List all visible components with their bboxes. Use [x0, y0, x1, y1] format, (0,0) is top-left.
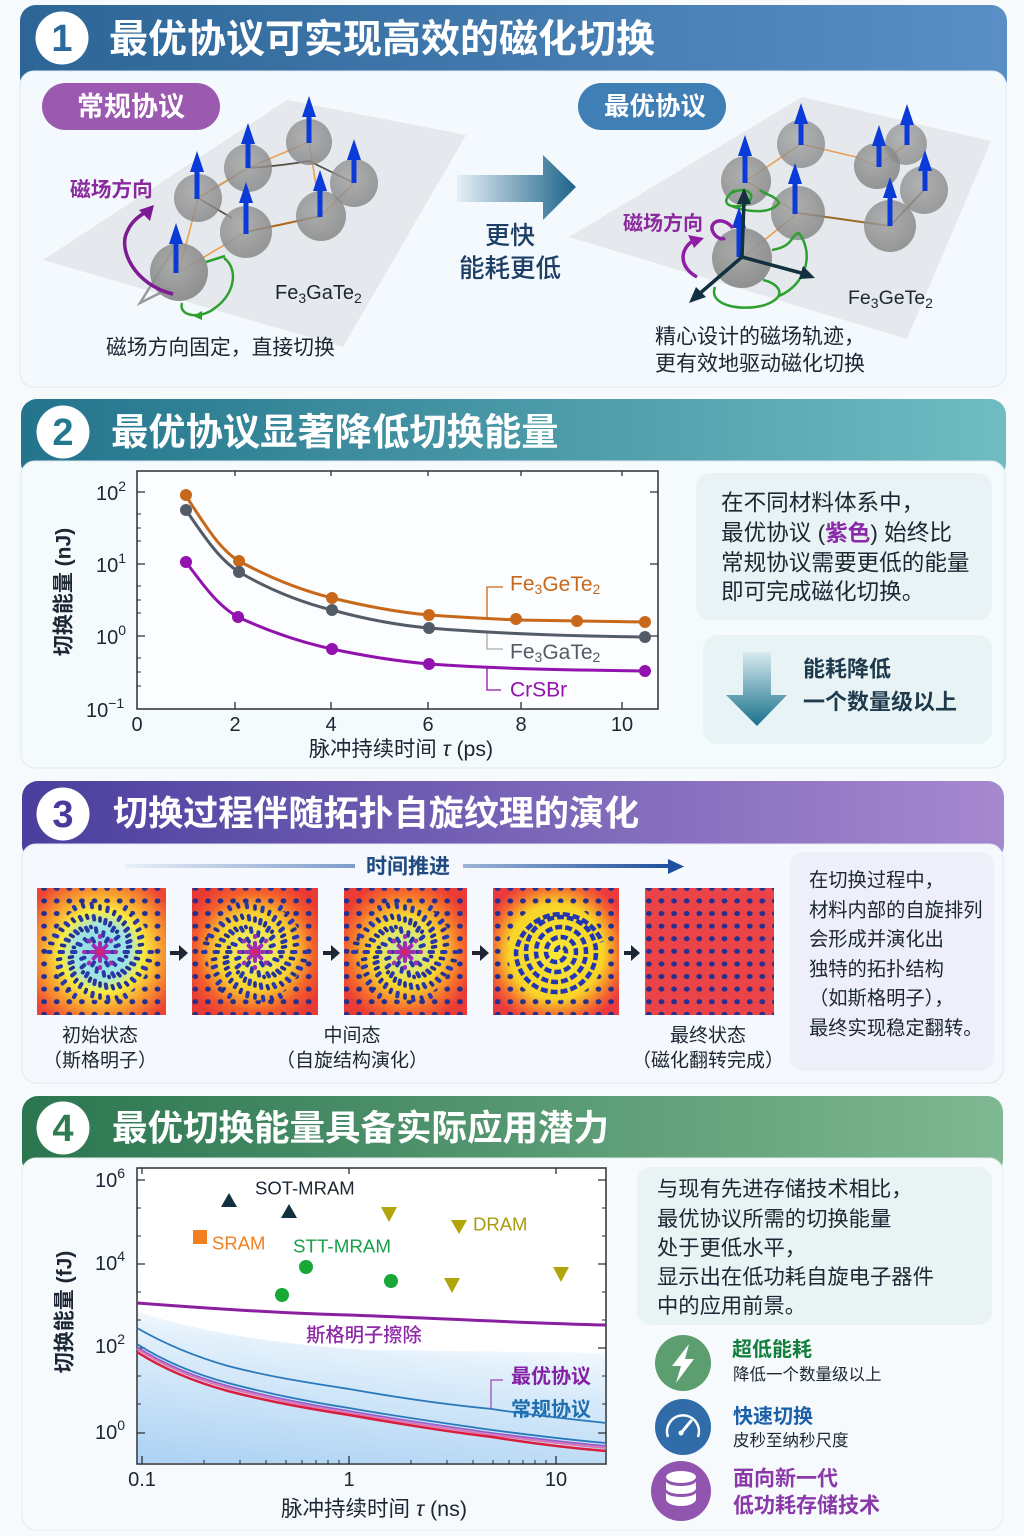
y tick labels: [86, 478, 126, 722]
callout: protocol comparison: 在不同材料体系中，: [721, 490, 924, 516]
callout: protocol comparison: [696, 473, 992, 620]
CrSBr series: [180, 556, 651, 677]
y tick labels: −1: [108, 695, 124, 711]
y tick labels: 10: [96, 627, 118, 649]
x axis title: 脉冲持续时间 τ (ps): [309, 737, 493, 761]
section 1 title: 最优协议可实现高效的磁化切换: [109, 18, 655, 62]
technology labels: [212, 1178, 527, 1256]
spin map 4: [493, 888, 619, 1015]
section 2: energy reduction: [21, 399, 1006, 768]
state labels: （斯格明子）: [43, 1050, 157, 1072]
y axis title: 切换能量 (fJ): [54, 1251, 76, 1373]
benefit: next generation: 面向新一代: [733, 1466, 838, 1490]
x tick labels: 0.1: [128, 1469, 156, 1491]
state labels: （磁化翻转完成）: [632, 1050, 784, 1072]
conventional protocol pill: [42, 83, 220, 130]
material label Fe3GaTe2: 3: [298, 290, 306, 306]
callout: application summary: 最优协议所需的切换能量: [657, 1207, 891, 1231]
energy comparison chart: [54, 1165, 606, 1521]
conventional lattice diagram: [43, 96, 466, 347]
section 4 title: 最优切换能量具备实际应用潜力: [112, 1108, 609, 1148]
y tick labels: 2: [118, 478, 126, 494]
optimal field label: 磁场方向: [623, 211, 703, 235]
material label Fe3GaTe2: GaTe: [306, 282, 354, 304]
series labels: 3: [535, 581, 543, 597]
state labels: 最终状态: [670, 1024, 746, 1046]
series labels: GeTe: [542, 572, 593, 596]
y tick labels: 2: [117, 1331, 125, 1347]
callout: application summary: 与现有先进存储技术相比，: [657, 1177, 913, 1201]
spin map 1: [37, 888, 166, 1015]
series labels: Fe: [510, 572, 535, 596]
material label Fe3GeTe2: 3: [871, 295, 879, 311]
x tick labels: 2: [229, 714, 241, 736]
icon: database: [651, 1461, 711, 1521]
optimal protocol pill: [578, 83, 726, 130]
y tick labels: 0: [118, 622, 126, 638]
protocol labels: 常规协议: [511, 1398, 591, 1421]
material label Fe3GaTe2: Fe: [275, 282, 298, 304]
section 4: application potential: [22, 1096, 1003, 1530]
state labels: 初始状态: [62, 1024, 138, 1046]
Fe3GeTe2 series: [180, 489, 651, 628]
benefit: low energy: 降低一个数量级以上: [733, 1365, 882, 1384]
Fe3GaTe2 series: [180, 504, 651, 643]
optimal lattice diagram: [569, 97, 991, 339]
callout: process text: 在切换过程中，: [809, 870, 944, 892]
callout: process text: 会形成并演化出: [809, 928, 944, 950]
section 3: topological texture: [22, 781, 1004, 1083]
callout: protocol comparison: 即可完成磁化切换。: [721, 580, 924, 604]
x tick labels: [128, 1469, 567, 1491]
callout: protocol comparison: 最优协议 (紫色) 始终比: [721, 520, 952, 546]
benefit: low energy: [732, 1338, 882, 1384]
callout: process text: 最终实现稳定翻转。: [809, 1018, 983, 1040]
optimal caption: [655, 326, 865, 376]
series labels: 2: [593, 649, 601, 665]
center benefit text: 更快: [485, 222, 535, 250]
y tick labels: 10: [96, 483, 118, 505]
y tick labels: 10: [95, 1170, 117, 1192]
protocol labels: [491, 1365, 591, 1421]
technology labels: DRAM: [473, 1214, 527, 1234]
erasure label: 斯格明子擦除: [306, 1324, 422, 1346]
benefit: next generation: 低功耗存储技术: [733, 1494, 880, 1518]
section 3 title: 切换过程伴随拓扑自旋纹理的演化: [113, 794, 639, 834]
section 1 number badge: [36, 12, 88, 64]
benefit: fast switching: 皮秒至纳秒尺度: [733, 1431, 848, 1450]
series labels: GaTe: [542, 640, 593, 664]
benefit: low energy: 超低能耗: [732, 1338, 812, 1361]
conventional protocol pill: 常规协议: [77, 92, 185, 122]
optimal caption: 精心设计的磁场轨迹，: [655, 326, 865, 348]
series labels: 3: [535, 649, 543, 665]
state labels: [43, 1024, 784, 1072]
spin map 3: [344, 888, 467, 1015]
y axis title: 切换能量 (nJ): [52, 528, 76, 656]
series labels: [510, 572, 601, 702]
section 1 body card: [20, 71, 1006, 387]
section 2 header band: [21, 399, 1006, 479]
spin map 5: [645, 888, 774, 1015]
x tick labels: 6: [422, 714, 434, 736]
section 4 number badge: [36, 1102, 90, 1154]
benefit: next generation: [733, 1466, 880, 1518]
y tick labels: 10: [95, 1422, 117, 1444]
STT-MRAM markers: [275, 1260, 398, 1302]
section 1 number badge: 1: [51, 18, 73, 60]
section 3 number badge: 3: [52, 794, 74, 836]
center benefit text: [459, 222, 561, 283]
callout: process text: [790, 852, 994, 1071]
y tick labels: 4: [117, 1248, 125, 1264]
y tick labels: 10: [95, 1336, 117, 1358]
conventional caption: 磁场方向固定，直接切换: [106, 336, 335, 360]
x axis title: 脉冲持续时间 τ (ns): [281, 1497, 467, 1521]
material label Fe3GaTe2: 2: [354, 290, 362, 306]
y tick labels: 1: [118, 550, 126, 566]
icon: speed gauge: [655, 1399, 711, 1455]
section 2 number badge: 2: [52, 412, 74, 454]
conventional field arc: [125, 205, 173, 294]
SRAM marker: [193, 1230, 207, 1244]
y tick labels: 10: [86, 700, 108, 722]
material label Fe3GeTe2: 2: [925, 295, 933, 311]
y tick labels: 0: [117, 1417, 125, 1433]
section 3 header band: [22, 781, 1004, 861]
technology labels: SOT-MRAM: [255, 1178, 355, 1198]
SOT-MRAM markers: [221, 1193, 297, 1218]
material label Fe3GeTe2: Fe: [848, 287, 871, 309]
energy drop text: [803, 656, 957, 714]
section 3 number badge: [36, 788, 90, 840]
series labels: Fe: [510, 640, 535, 664]
optimal caption: 更有效地驱动磁化切换: [655, 352, 865, 376]
callout: application summary: 处于更低水平，: [657, 1236, 806, 1260]
optimal protocol pill: 最优协议: [604, 93, 706, 121]
callout: protocol comparison: 常规协议需要更低的能量: [721, 550, 970, 576]
x tick labels: 10: [611, 714, 633, 736]
section 2 number badge: [36, 406, 90, 458]
section 1 header band: [20, 5, 1007, 95]
state labels: （自旋结构演化）: [276, 1050, 428, 1072]
energy drop text: 能耗降低: [803, 656, 891, 682]
optimal green trajectory: [714, 190, 807, 308]
energy vs pulse chart: [52, 471, 658, 761]
x tick labels: [131, 714, 633, 736]
series labels: CrSBr: [510, 678, 567, 702]
conventional field label: 磁场方向: [70, 178, 153, 202]
x tick labels: 1: [343, 1469, 355, 1491]
section 3 body card: [22, 844, 1003, 1083]
section 4 number badge: 4: [52, 1108, 74, 1150]
y tick labels: 10: [96, 555, 118, 577]
spin map 2: [192, 888, 318, 1015]
callout: process text: 独特的拓扑结构: [809, 958, 944, 980]
x tick labels: 8: [515, 714, 527, 736]
protocol curves: [137, 1328, 606, 1451]
y tick labels: 6: [117, 1165, 125, 1181]
skyrmion erasure curve: [137, 1303, 606, 1325]
faster arrow: [457, 155, 576, 220]
y tick labels: [95, 1165, 125, 1444]
technology labels: SRAM: [212, 1232, 265, 1254]
step arrows: [170, 945, 640, 961]
callout: application summary: [637, 1167, 992, 1325]
section 2 body card: [21, 461, 1005, 768]
conventional green trajectory: [182, 256, 233, 320]
x tick labels: 0: [131, 714, 143, 736]
callout: process text: （如斯格明子），: [809, 988, 954, 1010]
series labels: 2: [593, 581, 601, 597]
benefit: fast switching: [733, 1405, 848, 1450]
material label Fe3GeTe2: GeTe: [879, 287, 925, 309]
callout: application summary: 中的应用前景。: [657, 1294, 806, 1318]
time arrow: 时间推进: [366, 856, 450, 878]
callout: process text: 材料内部的自旋排列: [809, 900, 983, 922]
y tick labels: 10: [95, 1253, 117, 1275]
protocol labels: 最优协议: [511, 1365, 591, 1388]
DRAM markers: [381, 1207, 569, 1293]
icon: down arrow: [726, 652, 787, 726]
legend leaders: [487, 587, 503, 690]
optimal axes: [689, 188, 815, 303]
optimal field arcs: [683, 221, 733, 277]
energy drop text: 一个数量级以上: [803, 690, 957, 714]
callout: energy drop: [703, 635, 992, 744]
x tick labels: 10: [545, 1469, 567, 1491]
time arrow: [125, 856, 684, 878]
callout: application summary: 显示出在低功耗自旋电子器件: [657, 1265, 934, 1289]
icon: lightning bolt: [655, 1335, 711, 1391]
center benefit text: 能耗更低: [459, 255, 561, 283]
section 4 body card: [22, 1158, 1003, 1530]
section 2 title: 最优协议显著降低切换能量: [111, 411, 559, 453]
technology labels: STT-MRAM: [293, 1236, 391, 1256]
section 4 header band: [22, 1096, 1003, 1176]
state labels: 中间态: [323, 1024, 381, 1046]
x tick labels: 4: [325, 714, 337, 736]
benefit: fast switching: 快速切换: [733, 1405, 813, 1428]
section 1: optimal protocol switching: [20, 5, 1007, 387]
